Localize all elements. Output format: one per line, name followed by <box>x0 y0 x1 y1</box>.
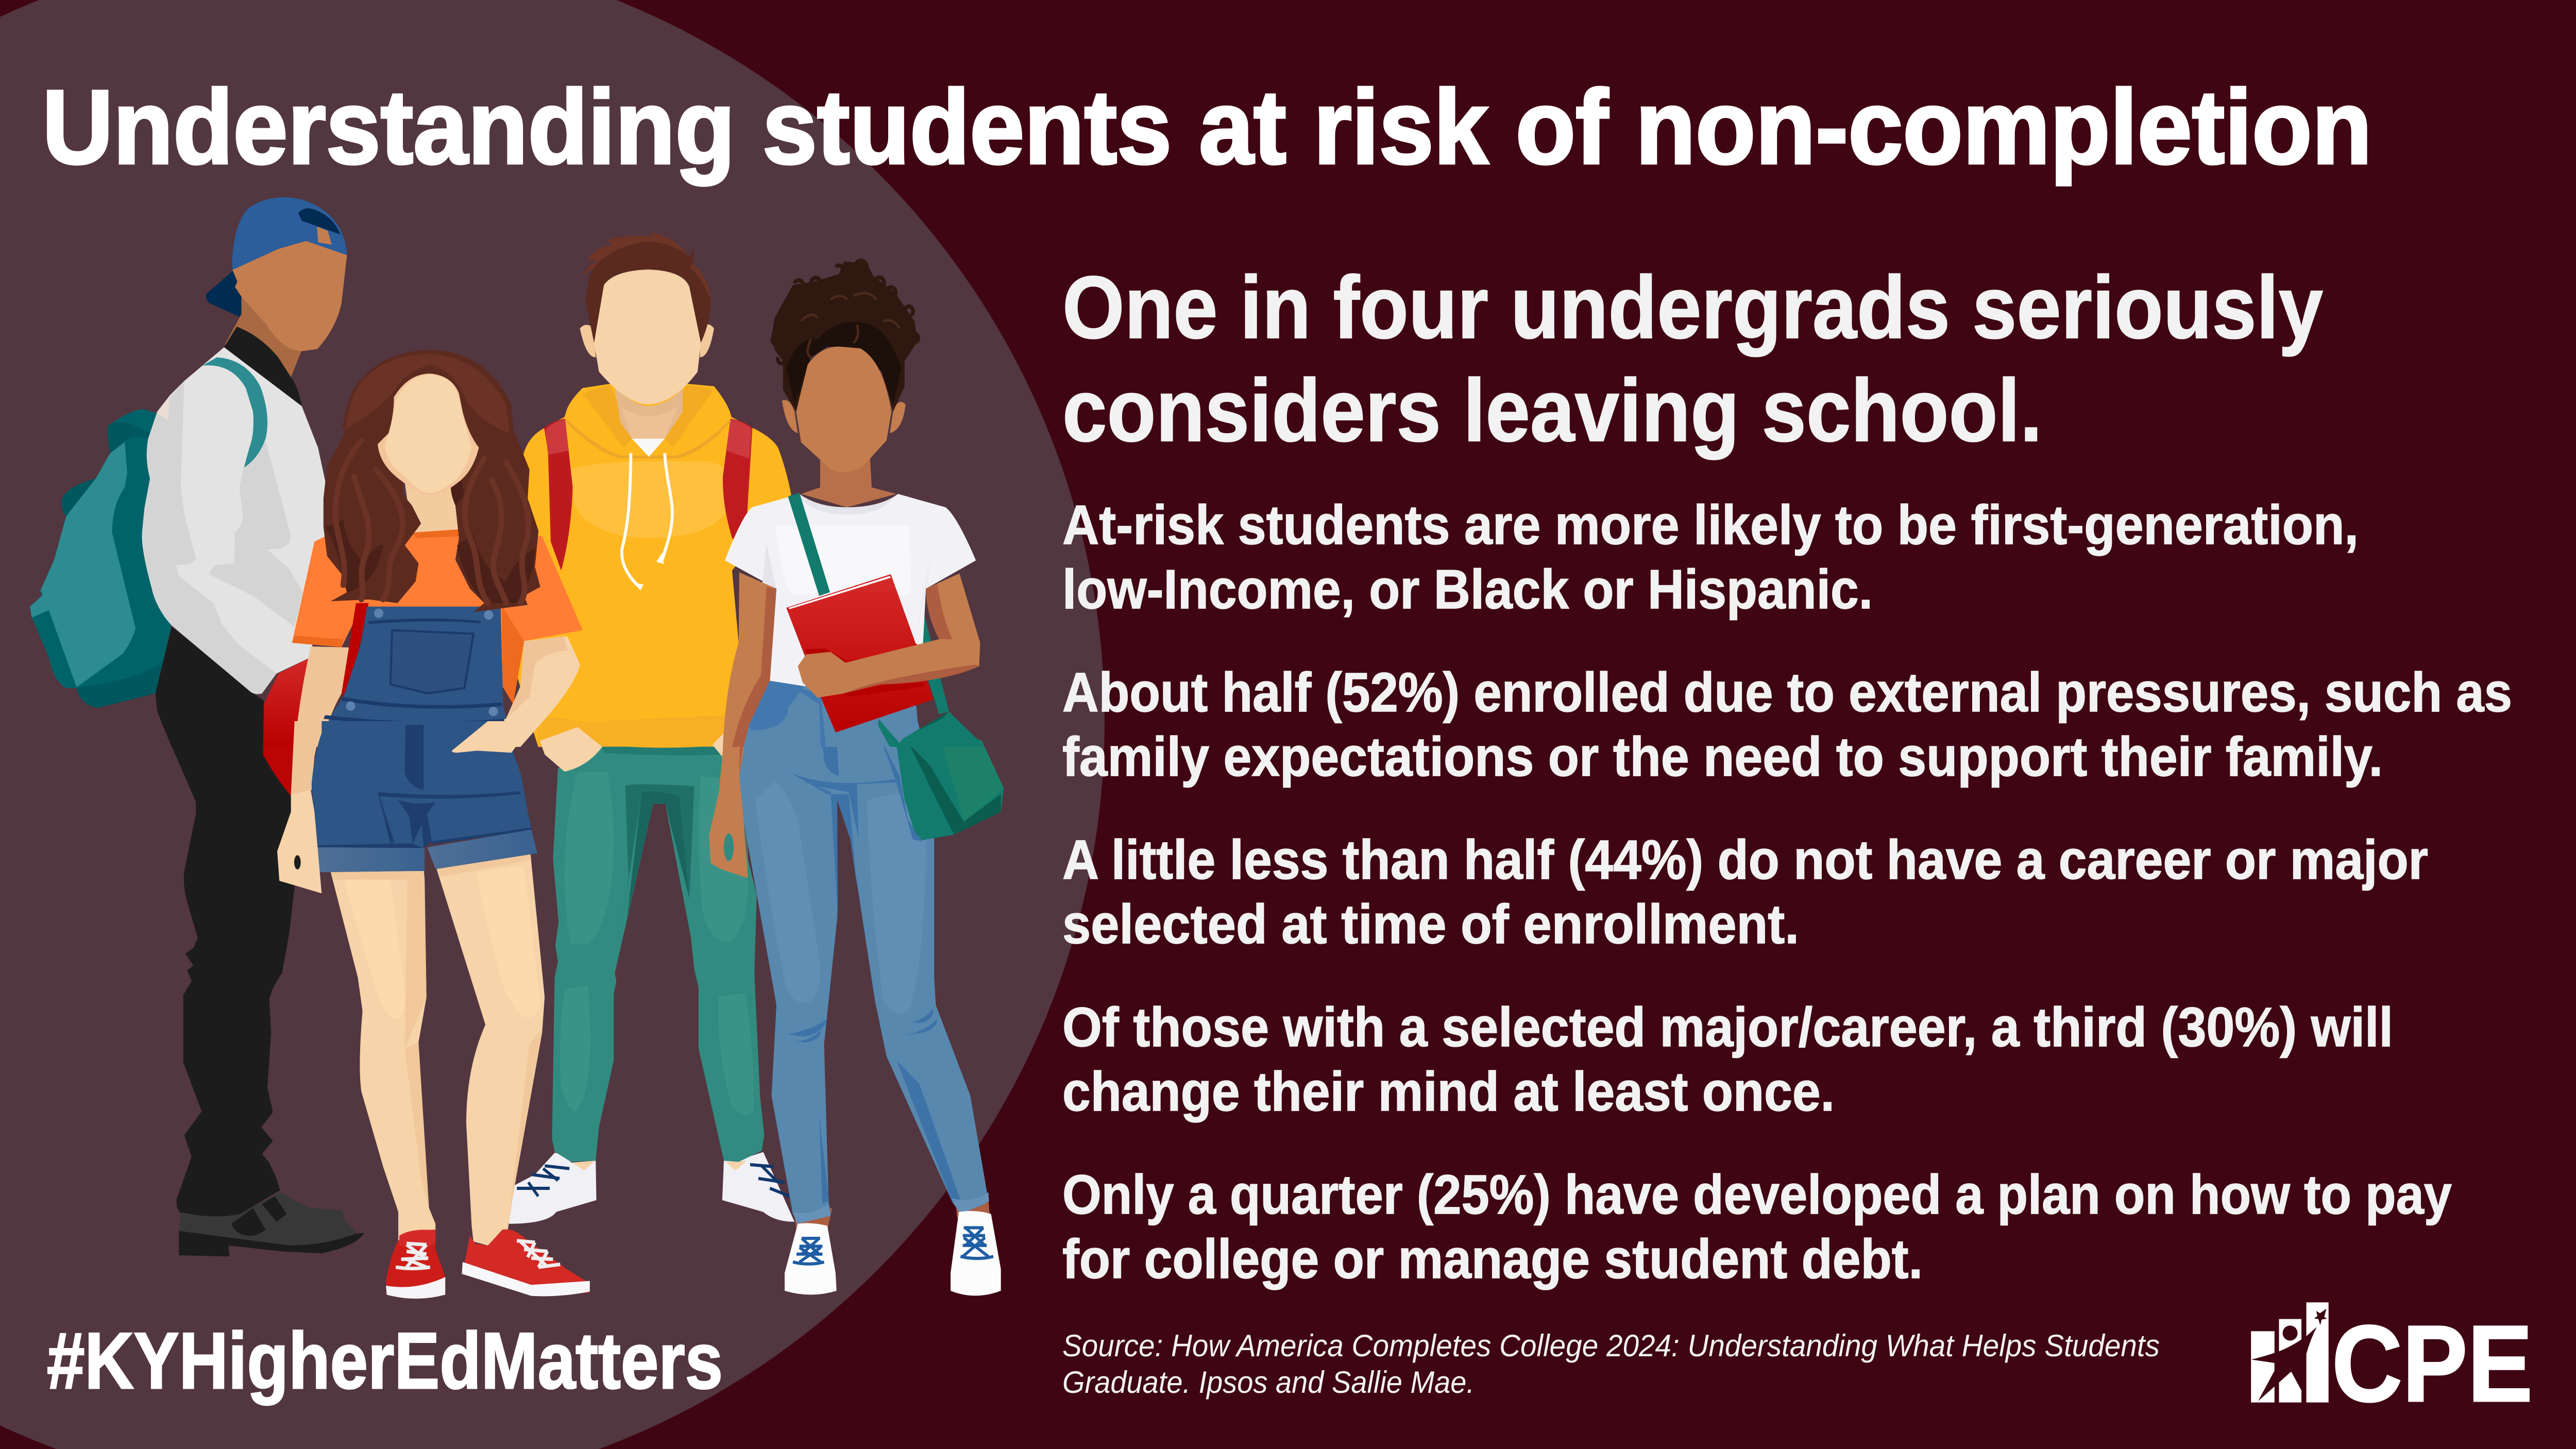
text block: plan to pay <box>1062 1163 2452 1290</box>
text block: change of mind: Of those with a selected major/career, a third (30%) will <box>1062 996 2393 1058</box>
source note <box>1062 1328 2160 1400</box>
illustration: group of four students <box>30 197 1004 1299</box>
text block: change of mind <box>1062 996 2393 1122</box>
text block: at-risk students: At-risk students are more likely to be first-generation, <box>1062 493 2359 556</box>
logo: CPE: CPE <box>2332 1303 2533 1424</box>
text: considers leaving school. <box>1062 361 2042 460</box>
source note: Source: How America Completes College 2024: Understanding What Helps Students <box>1062 1328 2160 1363</box>
title: Understanding students at risk of non-completion <box>42 69 2372 186</box>
student: curly-haired girl with red book and green bag <box>709 261 1004 1295</box>
text block: at-risk students: low-Income, or Black or Hispanic. <box>1062 558 1873 620</box>
text block: at-risk students <box>1062 493 2359 620</box>
hashtag: #KYHigherEdMatters <box>47 1316 723 1405</box>
text block: plan to pay: for college or manage student debt. <box>1062 1228 1923 1290</box>
logo: CPE <box>2251 1302 2533 1424</box>
student: boy in yellow hoodie <box>509 232 794 1224</box>
text block: plan to pay: Only a quarter (25%) have developed a plan on how to pay <box>1062 1163 2452 1225</box>
text block: no career or major selected <box>1062 828 2428 955</box>
source note: Graduate. Ipsos and Sallie Mae. <box>1062 1365 1475 1400</box>
student: girl in denim overalls <box>263 350 590 1299</box>
text block: no career or major selected: A little less than half (44%) do not have a career or major <box>1062 828 2428 891</box>
text block: external pressures <box>1062 661 2512 788</box>
background circle panel <box>0 0 1105 1449</box>
text block: change of mind: change their mind at least once. <box>1062 1060 1835 1122</box>
text block: no career or major selected: selected at time of enrollment. <box>1062 893 1799 955</box>
heading: One in four undergrads seriously <box>1062 258 2323 357</box>
student: man with cap and teal backpack <box>30 197 364 1256</box>
text block: external pressures: family expectations or the need to support their family. <box>1062 725 2383 788</box>
